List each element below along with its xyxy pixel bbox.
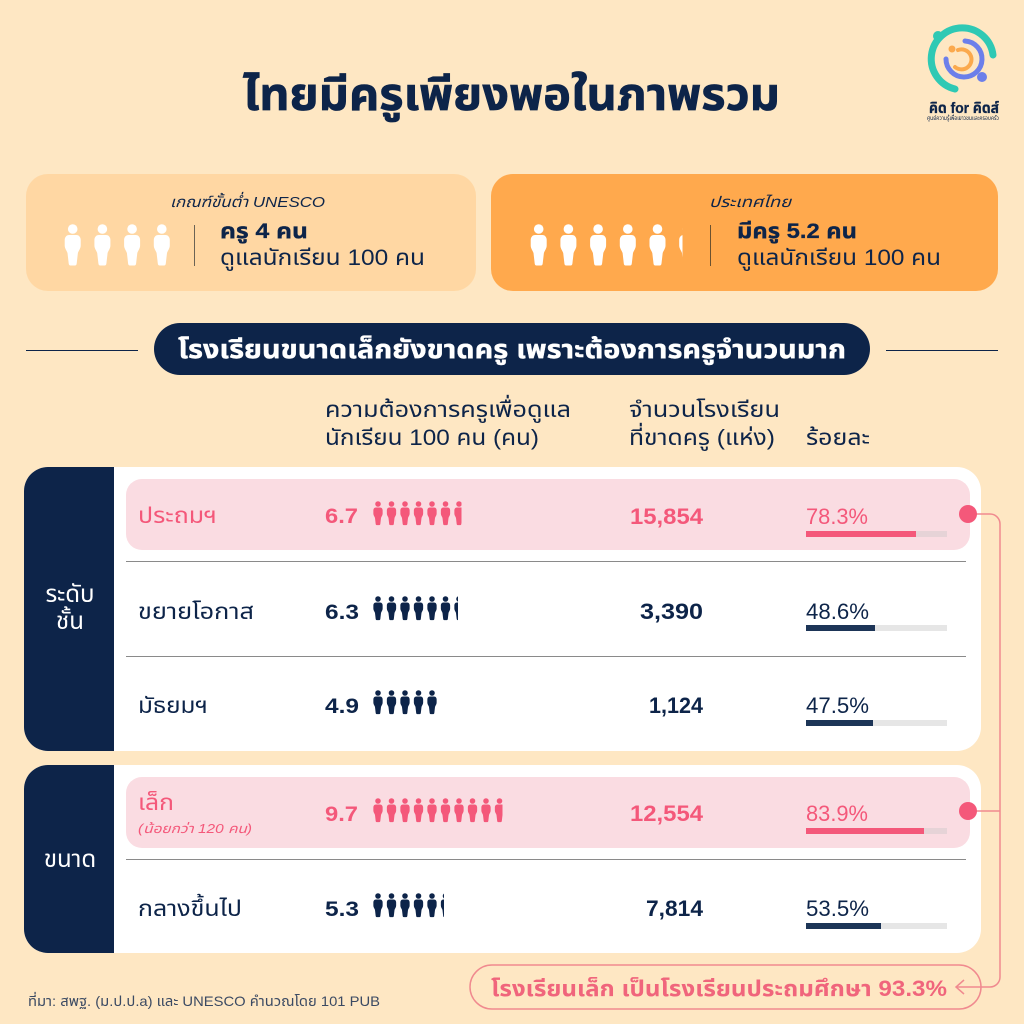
row: small schools: 12,554 <box>630 801 704 826</box>
text: per 100 students: ดูแลนักเรียน 100 คน <box>737 245 941 271</box>
row: medium and larger: 5.3 <box>325 898 359 921</box>
icon: 5.2 teachers <box>531 224 695 266</box>
section banner: โรงเรียนขนาดเล็กยังขาดครู เพราะต้องการครูจำนวนมาก <box>178 334 846 365</box>
panel heading: Thailand: ประเทศไทย <box>709 194 792 211</box>
row: extended <box>138 596 947 631</box>
panel: by school level <box>24 467 981 751</box>
callout: small schools are primary: โรงเรียนเล็ก เป็นโรงเรียนประถมศึกษา 93.3% <box>491 976 947 1001</box>
row: primary: 6.7 <box>325 505 358 528</box>
logo: คิด for คิดส์: ศูนย์ความรู้เพื่อเยาวชนและครอบครัว <box>927 113 999 122</box>
row: small schools: 9.7 <box>325 803 358 826</box>
row: small schools: 83.9% <box>806 801 868 826</box>
row: primary <box>126 479 970 550</box>
panel: by school size <box>24 765 981 953</box>
column header: teachers needed <box>325 394 571 450</box>
row: medium and larger: กลางขึ้นไป <box>138 893 242 921</box>
callout: connector arrow <box>956 505 1000 994</box>
row: extended: 6.3 <box>325 601 359 624</box>
panel heading: UNESCO: เกณฑ์ขั้นต่ำ UNESCO <box>170 191 325 211</box>
panel: UNESCO minimum <box>26 174 476 291</box>
row: secondary: 47.5% <box>806 693 869 718</box>
column header: teachers needed: นักเรียน 100 คน (คน) <box>325 425 539 450</box>
row: secondary <box>138 690 947 726</box>
column header: percent: ร้อยละ <box>806 425 870 450</box>
row: extended: 3,390 <box>640 599 703 624</box>
column header: schools lacking teachers: จำนวนโรงเรียน <box>629 397 780 422</box>
row: primary: 15,854 <box>630 504 704 529</box>
row: medium and larger: 7,814 <box>646 896 704 921</box>
text: 5.2 teachers: มีครู 5.2 คน <box>737 220 857 244</box>
side label: size: ขนาด <box>44 846 96 873</box>
row: secondary: มัธยมฯ <box>138 693 208 718</box>
icon: four teachers <box>65 224 170 266</box>
callout: small schools are primary <box>470 965 981 1009</box>
row: medium and larger: 53.5% <box>806 896 869 921</box>
side label: level: ชั้น <box>56 605 84 635</box>
source note: ที่มา: สพฐ. (ม.ป.ป.a) และ UNESCO คำนวณโดย 101 PUB <box>28 991 380 1009</box>
row: small schools: (น้อยกว่า 120 คน) <box>138 821 252 836</box>
row: medium and larger <box>138 893 947 929</box>
row: extended: ขยายโอกาส <box>138 599 254 624</box>
side label: level: ระดับ <box>45 581 95 608</box>
row: secondary: 1,124 <box>649 693 704 718</box>
row: small schools <box>126 777 970 848</box>
panel: Thailand <box>491 174 998 291</box>
row: secondary: 4.9 <box>325 695 359 718</box>
logo: คิด for คิดส์ <box>927 28 999 122</box>
section banner <box>154 323 870 375</box>
row: small schools: เล็ก <box>138 790 174 815</box>
row: extended: 48.6% <box>806 599 869 624</box>
side label: level <box>45 581 95 635</box>
logo: คิด for คิดส์: คิด for คิดส์ <box>929 100 999 117</box>
title: ไทยมีครูเพียงพอในภาพรวม <box>243 69 780 122</box>
column header: schools lacking teachers: ที่ขาดครู (แห่ง) <box>629 422 775 451</box>
column header: schools lacking teachers <box>629 397 780 451</box>
row: primary: 78.3% <box>806 504 868 529</box>
column header: teachers needed: ความต้องการครูเพื่อดูแล <box>325 394 571 423</box>
row: primary: ประถมฯ <box>138 503 217 528</box>
text: 4 teachers: ครู 4 คน <box>220 220 308 244</box>
text: per 100 students: ดูแลนักเรียน 100 คน <box>220 245 425 271</box>
